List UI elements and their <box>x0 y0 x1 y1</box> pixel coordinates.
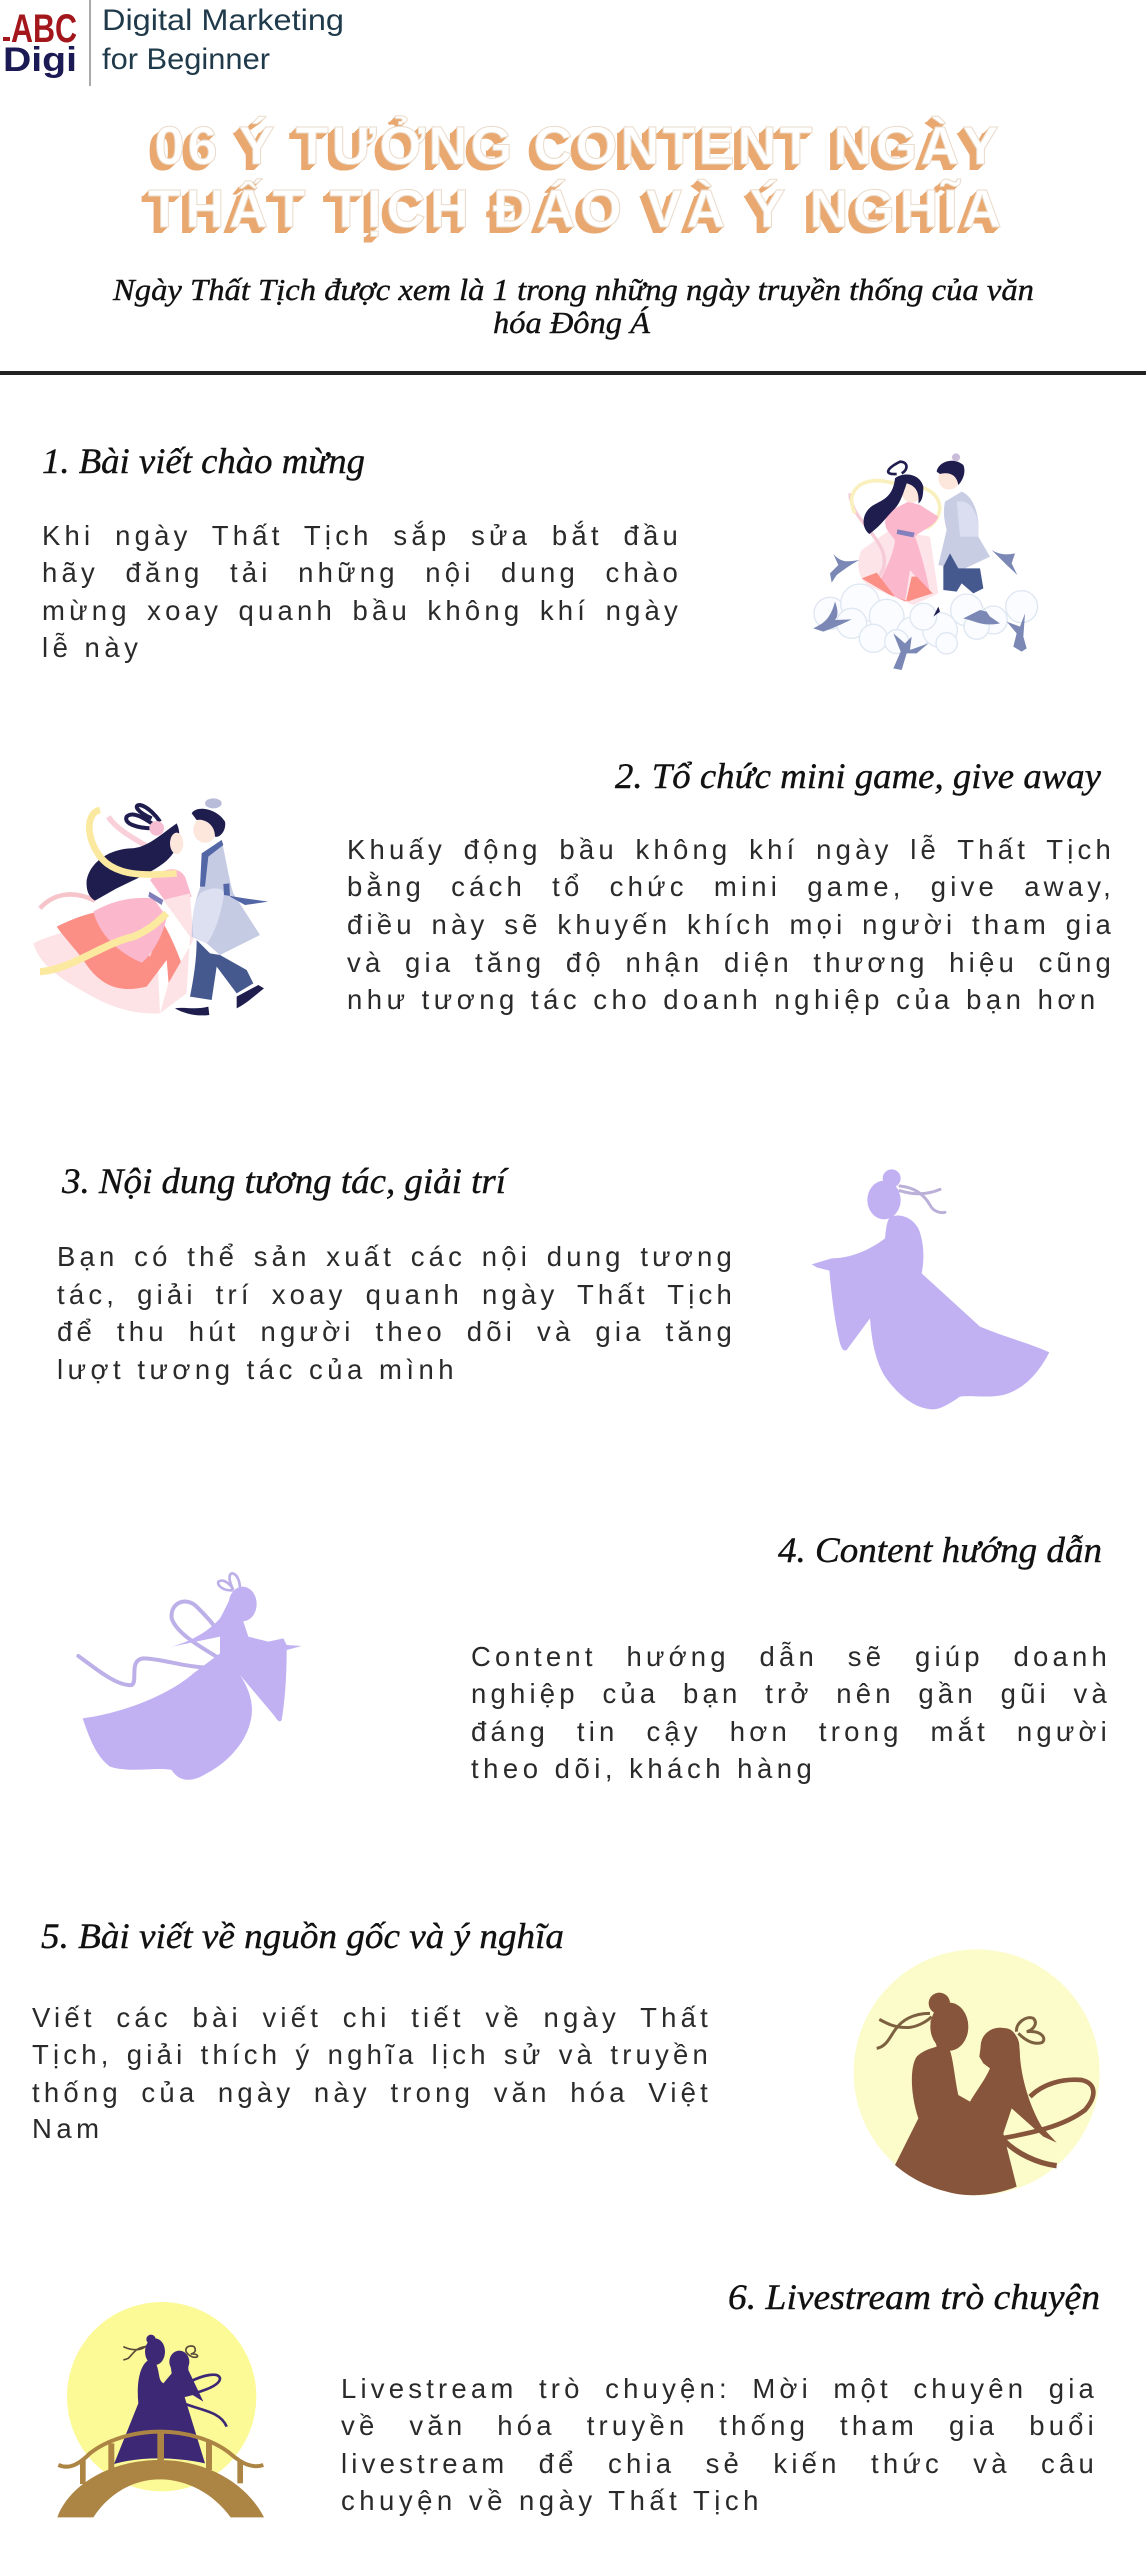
title: 06 Ý TƯỞNG CONTENT NGÀY <box>155 116 1001 176</box>
text block 3: để thu hút người theo dõi và gia tăng <box>57 1316 736 1347</box>
logo: ABC Digi, Digital Marketing for Beginner: ABC <box>11 7 77 51</box>
text block 1: hãy đăng tải những nội dung chào <box>42 557 682 588</box>
title: THẤT TỊCH ĐÁO VÀ Ý NGHĨA <box>148 179 1006 239</box>
illustration: couple embracing <box>34 798 268 1016</box>
text block 3: lượt tương tác của mình <box>57 1354 458 1385</box>
illustration: brown couple silhouette on pale moon <box>854 1949 1100 2196</box>
text block 1: lễ này <box>42 632 142 663</box>
text block 1: mừng xoay quanh bầu không khí ngày <box>42 595 682 626</box>
text block 4: Content hướng dẫn sẽ giúp doanh <box>471 1641 1111 1672</box>
illustration: couple on clouds with birds <box>813 453 1038 670</box>
text block 6: chuyện về ngày Thất Tịch <box>341 2485 763 2516</box>
heading 5: 5. Bài viết về nguồn gốc và ý nghĩa <box>41 1916 564 1956</box>
heading 6: 6. Livestream trò chuyện <box>728 2277 1100 2317</box>
text block 5: Nam <box>32 2113 104 2144</box>
logo: ABC Digi, Digital Marketing for Beginner: for Beginner <box>102 43 270 76</box>
text block 2: điều này sẽ khuyến khích mọi người tham gia <box>347 909 1115 940</box>
text block 4: nghiệp của bạn trở nên gần gũi và <box>471 1678 1111 1709</box>
panel: section 4 <box>76 1530 1111 1784</box>
text block 4 <box>471 1641 1111 1784</box>
subtitle: hóa Đông Á <box>493 305 651 340</box>
text block 2: bằng cách tổ chức mini game, give away, <box>347 871 1115 902</box>
heading 4: 4. Content hướng dẫn <box>778 1530 1102 1570</box>
text block 6: livestream để chia sẻ kiến thức và câu <box>341 2448 1098 2479</box>
heading 3: 3. Nội dung tương tác, giải trí <box>61 1161 509 1201</box>
text block 6: về văn hóa truyền thống tham gia buổi <box>341 2410 1098 2441</box>
text block 4: theo dõi, khách hàng <box>471 1753 816 1784</box>
subtitle: Ngày Thất Tịch được xem là 1 trong những ngày truyền thống của văn <box>112 272 1034 307</box>
logo: ABC Digi, Digital Marketing for Beginner: Digi <box>3 41 77 79</box>
heading 1: 1. Bài viết chào mừng <box>42 441 365 481</box>
panel: section 5 <box>32 1916 1100 2196</box>
logo: ABC Digi, Digital Marketing for Beginner: Digital Marketing <box>102 4 344 37</box>
text block 3 <box>57 1241 736 1385</box>
panel: section 1 <box>42 441 1038 670</box>
text block 1: Khi ngày Thất Tịch sắp sửa bắt đầu <box>42 520 682 551</box>
logo: ABC Digi, Digital Marketing for Beginner <box>3 0 344 86</box>
illustration: purple silhouette with ribbon facing right <box>76 1572 302 1780</box>
text block 3: tác, giải trí xoay quanh ngày Thất Tịch <box>57 1279 736 1310</box>
text block 5: Viết các bài viết chi tiết về ngày Thất <box>32 2002 712 2033</box>
illustration: purple silhouette facing left <box>812 1169 1050 1410</box>
text block 5: Tịch, giải thích ý nghĩa lịch sử và truyền <box>32 2039 712 2070</box>
text block 5 <box>32 2002 712 2144</box>
text block 1 <box>42 520 682 663</box>
heading 2: 2. Tổ chức mini game, give away <box>615 756 1101 796</box>
text block 6: Livestream trò chuyện: Mời một chuyên gia <box>341 2373 1098 2404</box>
text block 3: Bạn có thể sản xuất các nội dung tương <box>57 1241 736 1272</box>
title <box>142 115 1006 242</box>
panel: section 2 <box>34 756 1115 1016</box>
text block 2: Khuấy động bầu không khí ngày lễ Thất Tịch <box>347 834 1115 865</box>
text block 5: thống của ngày này trong văn hóa Việt <box>32 2077 712 2108</box>
subtitle <box>112 272 1034 340</box>
text block 2: như tương tác cho doanh nghiệp của bạn hơn <box>347 984 1100 1015</box>
text block 2: và gia tăng độ nhận diện thương hiệu cũng <box>347 947 1115 978</box>
panel: section 3 <box>57 1161 1050 1410</box>
text block 4: đáng tin cậy hơn trong mắt người <box>471 1716 1111 1747</box>
text block 2 <box>347 834 1115 1015</box>
panel: section 6 <box>57 2277 1100 2518</box>
text block 6 <box>341 2373 1098 2516</box>
illustration: couple on bridge with yellow moon <box>57 2302 264 2518</box>
